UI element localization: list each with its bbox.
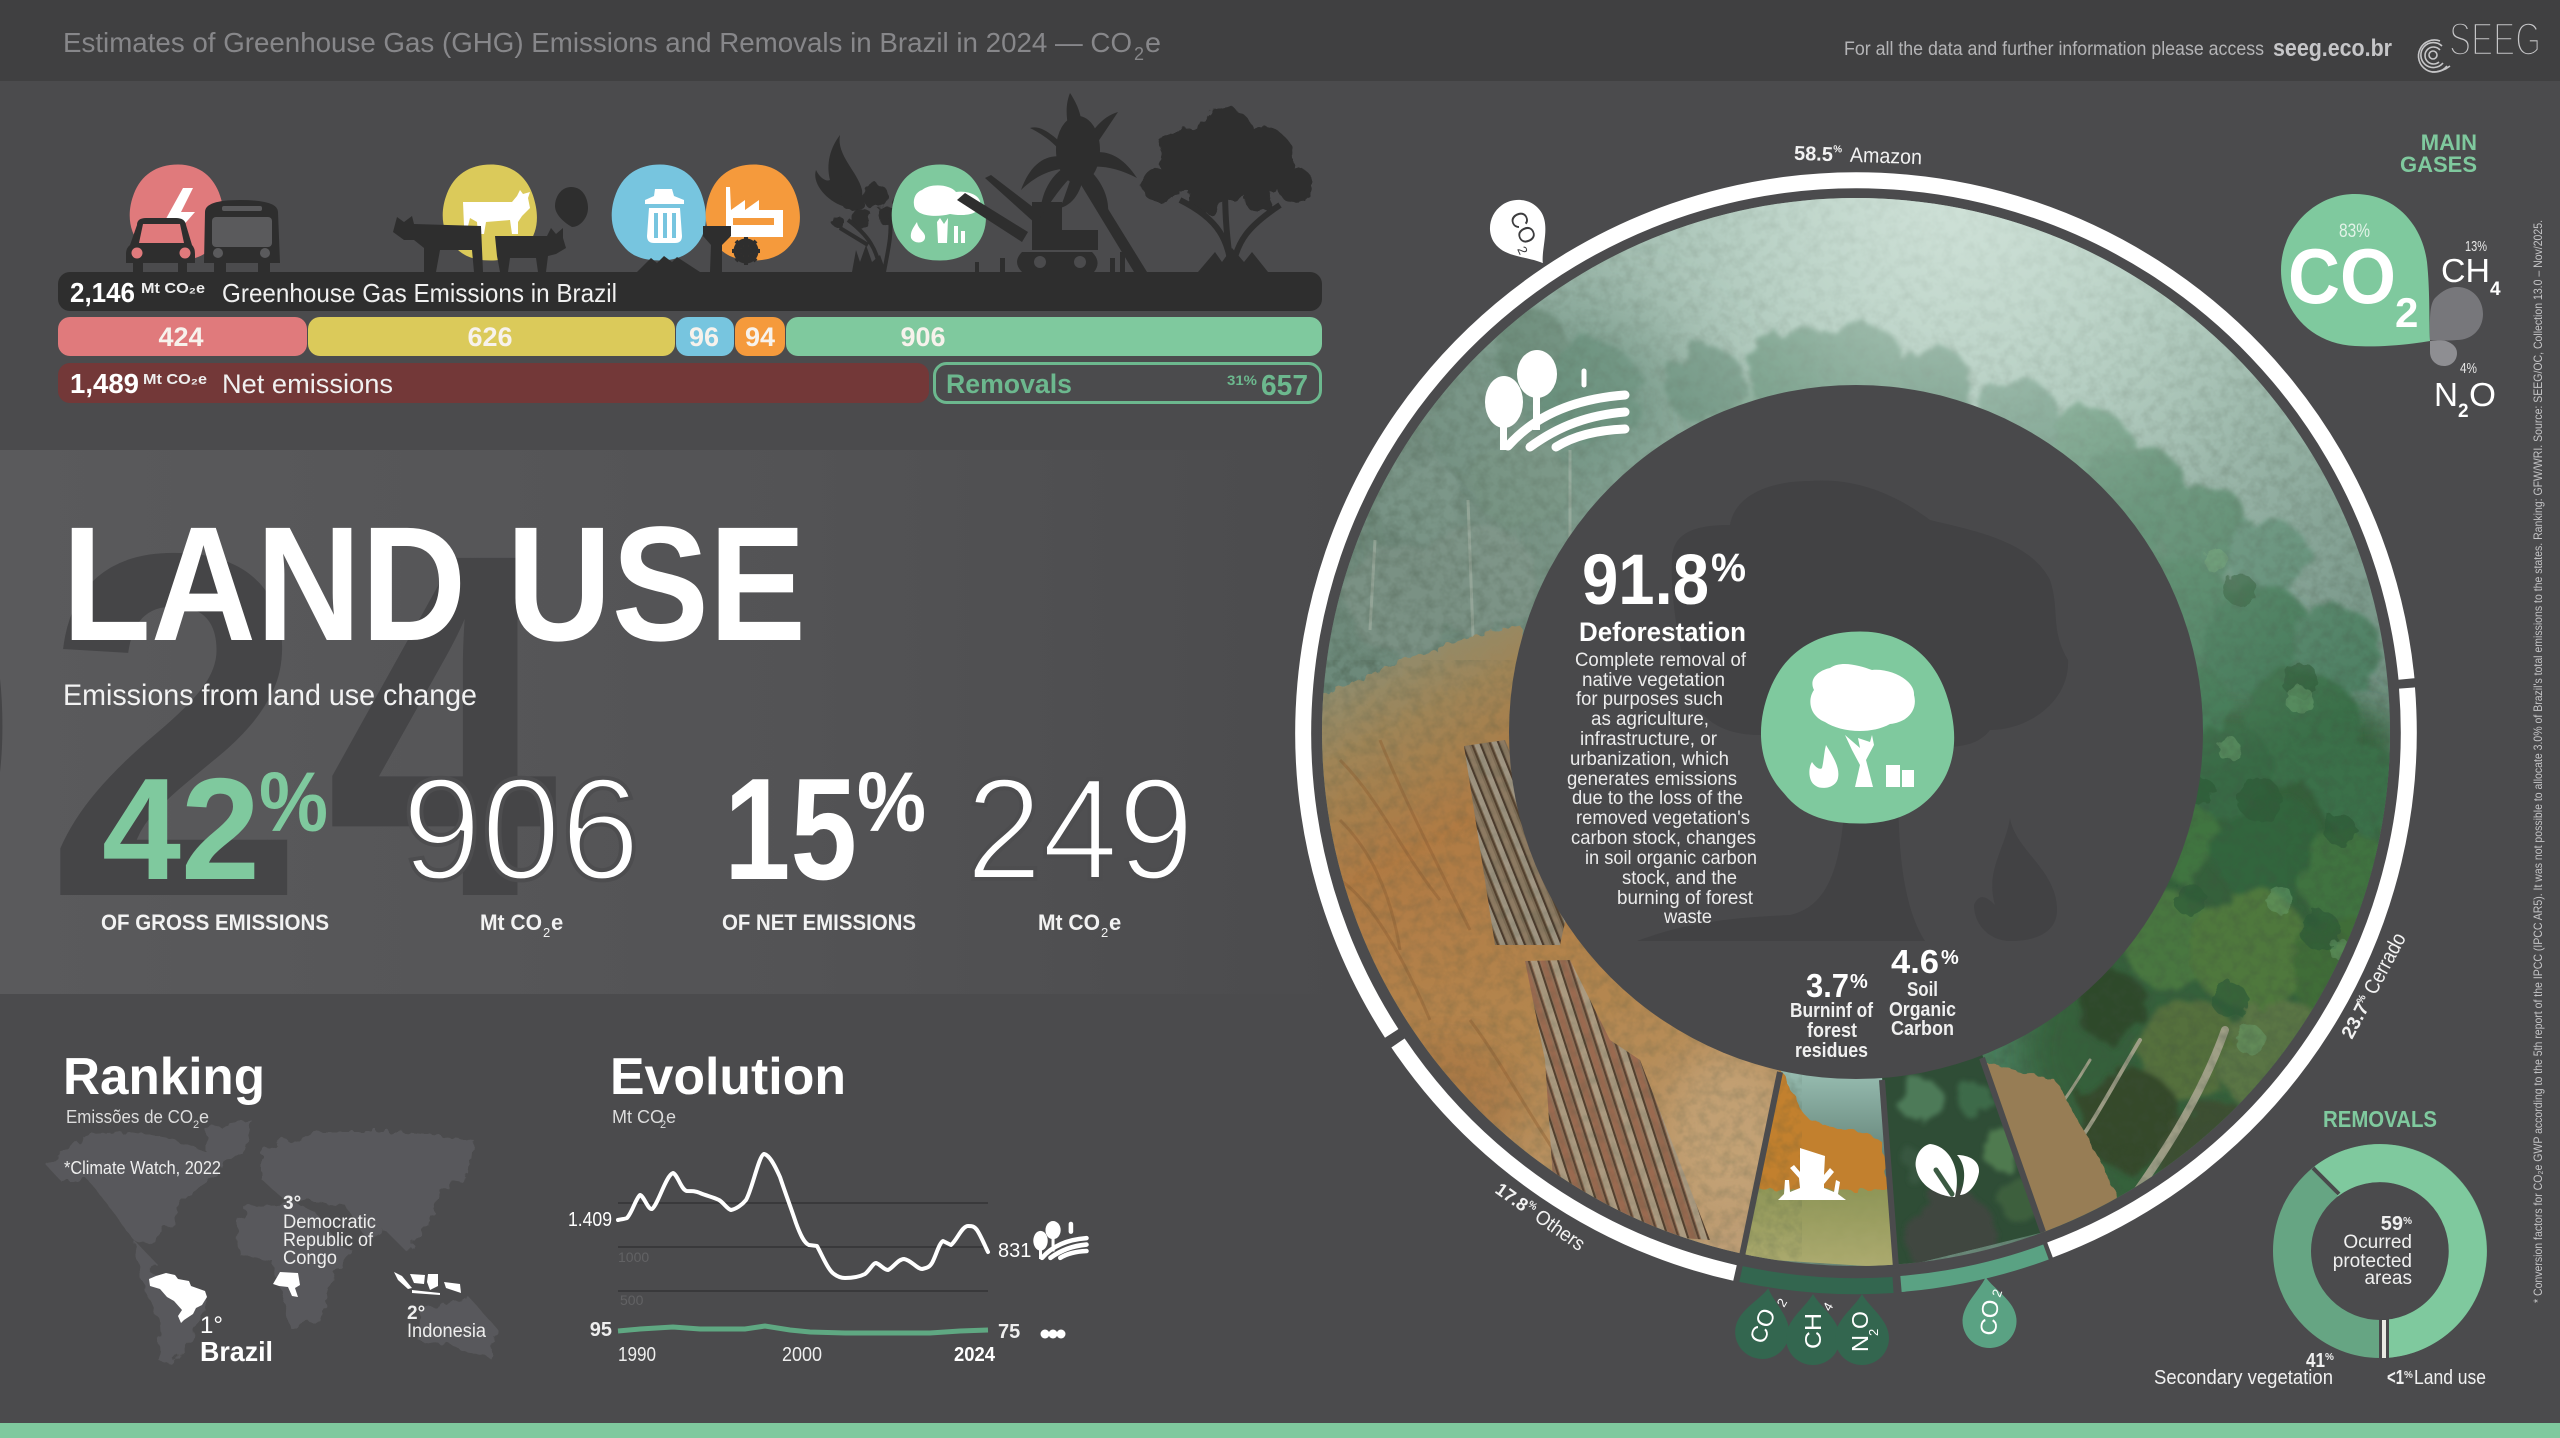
deforestation description: stock, and the bbox=[1622, 868, 1737, 889]
stacked logs bbox=[1464, 740, 1710, 1240]
icon: land use on photo bbox=[1485, 350, 1625, 450]
label: 3rd DR Congo: Congo bbox=[283, 1248, 337, 1269]
website link: seeg.eco.br bbox=[2273, 35, 2392, 62]
stat: soil organic carbon bbox=[1889, 943, 1959, 1040]
gas drops: burning: CO bbox=[1744, 1305, 1781, 1347]
label: 3rd DR Congo: Republic of bbox=[283, 1230, 374, 1251]
line chart: 95 bbox=[590, 1319, 612, 1341]
biome ring bbox=[1303, 180, 2409, 1286]
gas drops: burning: 4 bbox=[1820, 1300, 1836, 1314]
donut label: land use bbox=[2387, 1367, 2486, 1389]
label: CO2 83%: 83% bbox=[2339, 221, 2370, 242]
stat: 15% of net emissions: % bbox=[857, 755, 926, 849]
deforestation description: generates emissions bbox=[1567, 769, 1737, 790]
heading: main gases: GASES bbox=[2400, 152, 2477, 177]
stat: soil organic carbon: Soil bbox=[1907, 979, 1938, 1001]
stat: 42% of gross emissions: 42 bbox=[102, 748, 260, 910]
pin: CO2 Amazon: CO bbox=[1504, 207, 1542, 248]
icon: soil leaves bbox=[1916, 1144, 1979, 1197]
stat: 42% of gross emissions: % bbox=[259, 755, 328, 849]
deforestation description: urbanization, which bbox=[1570, 749, 1729, 770]
segment dividers bbox=[1742, 1058, 2043, 1268]
mist overlay bbox=[1432, 198, 2360, 718]
icon: tree silhouette bbox=[1142, 107, 1313, 272]
heading: ranking: Ranking bbox=[63, 1048, 265, 1106]
deforestation description: waste bbox=[1663, 907, 1712, 928]
panel: main gases bbox=[2281, 130, 2501, 422]
sector icons above the emissions bars bbox=[126, 93, 1313, 272]
deforestation description: in soil organic carbon bbox=[1585, 848, 1757, 869]
gas drops: burning: 2 bbox=[1866, 1329, 1881, 1336]
net emissions bar bbox=[58, 363, 929, 403]
label: 1st Brazil bbox=[200, 1312, 273, 1367]
net emissions bar: Net emissions bbox=[222, 369, 393, 399]
stat: deforestation: % bbox=[1711, 546, 1746, 590]
icon: industry blob bbox=[703, 164, 800, 272]
deforestation description: removed vegetation's bbox=[1576, 808, 1750, 829]
heading: main gases: MAIN bbox=[2421, 130, 2477, 155]
icon: land use blob with machinery and trees bbox=[815, 93, 1313, 272]
label: Others: Others bbox=[1530, 1206, 1589, 1256]
segment: waste 96: 96 bbox=[689, 322, 719, 352]
donut label: protected areas: % bbox=[2403, 1216, 2412, 1227]
stat: burning of forest residues: 3.7 bbox=[1806, 967, 1849, 1004]
header title: 2 bbox=[1134, 44, 1144, 64]
label: CO2 83% bbox=[2288, 221, 2418, 336]
label: 3rd DR Congo bbox=[283, 1193, 376, 1269]
net emissions bar: Mt CO₂e bbox=[143, 371, 207, 388]
removals bar bbox=[934, 364, 1320, 402]
deforestation description: native vegetation bbox=[1582, 670, 1725, 691]
label: N2O 4% bbox=[2434, 360, 2496, 422]
gas drops: burning: N bbox=[1847, 1335, 1873, 1352]
drop: CH4 bbox=[2430, 287, 2483, 340]
label: N2O 4%: O bbox=[2469, 376, 2496, 413]
label: Amazon: 58.5 bbox=[1794, 143, 1833, 166]
subheading: Mt CO bbox=[612, 1107, 664, 1127]
map: DR Congo bbox=[273, 1272, 300, 1297]
icon: waste blob bbox=[612, 164, 706, 272]
background year 2024: 2 bbox=[44, 451, 306, 999]
stat: deforestation: 91.8 bbox=[1582, 541, 1709, 620]
emissions bars bbox=[58, 272, 1322, 403]
gas drop: soil bbox=[1959, 1275, 2019, 1350]
note: climate watch: *Climate Watch, 2022 bbox=[64, 1158, 221, 1178]
deforestation description bbox=[1567, 650, 1757, 928]
ground texture grain bbox=[1322, 660, 1802, 1266]
segment: agriculture 626: 626 bbox=[467, 322, 513, 352]
header title: e bbox=[1145, 27, 1161, 58]
label: 2nd Indonesia: Indonesia bbox=[407, 1321, 486, 1342]
donut label: protected areas: areas bbox=[2364, 1268, 2412, 1289]
line chart: 1990 bbox=[618, 1344, 656, 1366]
donut label: protected areas: Ocurred bbox=[2343, 1232, 2412, 1253]
segment: agriculture 626 bbox=[308, 317, 675, 356]
arc: soil gases bbox=[1901, 1252, 2046, 1284]
arc: Cerrado bbox=[2050, 688, 2409, 1250]
world map bbox=[46, 1120, 498, 1363]
label: Amazon bbox=[1794, 142, 1922, 169]
stat: burning of forest residues bbox=[1790, 967, 1873, 1062]
stat: 906 Mt CO2e: 906 bbox=[402, 748, 640, 910]
map: Brazil bbox=[149, 1273, 207, 1323]
subheading: e bbox=[666, 1107, 676, 1127]
burn segment photo bbox=[1746, 1070, 1893, 1266]
sand on the right side bbox=[1987, 1063, 2117, 1232]
line: land use bbox=[618, 1154, 988, 1278]
deforestation description: as agriculture, bbox=[1591, 709, 1709, 730]
stat: 15% of net emissions: OF NET EMISSIONS bbox=[722, 910, 916, 935]
stat: soil organic carbon: Organic bbox=[1889, 999, 1956, 1021]
icon: agriculture blob with cattle bbox=[393, 164, 588, 272]
subtitle: Emissions from land use change bbox=[63, 679, 477, 712]
segment: energy 424 bbox=[58, 317, 307, 356]
line chart bbox=[568, 1154, 1031, 1366]
panel: ranking bbox=[46, 1048, 498, 1367]
stat: deforestation bbox=[1567, 541, 1757, 928]
donut label: secondary vegetation: Secondary vegetation bbox=[2154, 1367, 2333, 1389]
arc: burning gases bbox=[1741, 1274, 1893, 1286]
drop: N2O bbox=[2430, 340, 2457, 366]
stat: 249 Mt CO2e: 2 bbox=[1101, 925, 1108, 940]
label: 1st Brazil: 1° bbox=[200, 1312, 223, 1339]
title: land use: LAND USE bbox=[62, 492, 806, 675]
header access note: For all the data and further information please access bbox=[1844, 39, 2264, 60]
soil segment photo bbox=[1882, 1055, 2044, 1264]
segment: waste 96 bbox=[676, 317, 734, 356]
stat: 15% of net emissions bbox=[722, 748, 926, 935]
stat: 42% of gross emissions: OF GROSS EMISSIONS bbox=[101, 910, 329, 935]
gas drop: soil: CO bbox=[1975, 1299, 2003, 1336]
gas drops: burning: 2 bbox=[1774, 1296, 1790, 1310]
label: Others: 17.8 bbox=[1492, 1179, 1532, 1215]
stat: 42% of gross emissions bbox=[101, 748, 329, 935]
label: N2O 4%: 4% bbox=[2460, 360, 2477, 377]
label: N2O 4%: N bbox=[2434, 376, 2458, 413]
label: 1st Brazil: Brazil bbox=[200, 1336, 273, 1367]
donut label: secondary vegetation: % bbox=[2325, 1352, 2334, 1363]
deforestation description: due to the loss of the bbox=[1572, 788, 1743, 809]
heading: removals: REMOVALS bbox=[2323, 1106, 2437, 1132]
segment: land use 906 bbox=[786, 317, 1322, 356]
label: Amazon: Amazon bbox=[1850, 144, 1922, 169]
label: Amazon: % bbox=[1833, 144, 1842, 155]
stat: deforestation: Deforestation bbox=[1579, 617, 1746, 647]
label: Cerrado: % bbox=[2355, 993, 2369, 1006]
line: removals bbox=[618, 1326, 988, 1333]
panel: evolution bbox=[568, 1048, 1086, 1366]
heading: main gases bbox=[2400, 130, 2477, 177]
heading: evolution: Evolution bbox=[610, 1048, 846, 1106]
deforestation description: for purposes such bbox=[1576, 689, 1723, 710]
forest canopy bbox=[1700, 397, 2400, 1270]
line chart: 75 bbox=[998, 1321, 1020, 1343]
gross emissions bar: Mt CO₂e bbox=[141, 280, 205, 297]
arc: Amazon bbox=[1303, 180, 2406, 1033]
bare trunks bbox=[2065, 1026, 2229, 1188]
line chart: 831 bbox=[998, 1240, 1031, 1262]
source footnote: * Conversion factors for CO₂e GWP according to the 5th report of the IPCC (IPCC AR5). It was not possible to allocate 3.0% of Brazil's total emissions to the states. Ranking: GFW/WRI. Source: SEEG/OC, Collection 13.0 – Nov/2025. bbox=[2531, 220, 2545, 1303]
label: CH4 13%: 13% bbox=[2465, 238, 2487, 255]
segment: industry 94: 94 bbox=[745, 322, 775, 352]
subheading: 2 bbox=[193, 1119, 199, 1131]
line chart: 1.409 bbox=[568, 1209, 612, 1231]
donut label: secondary vegetation bbox=[2154, 1350, 2334, 1389]
gross emissions bar: 2,146 bbox=[70, 277, 135, 308]
gross emissions bar bbox=[58, 272, 1322, 311]
stat: 906 Mt CO2e: 2 bbox=[543, 925, 550, 940]
background year 2024: 4 bbox=[326, 451, 561, 999]
donut label: secondary vegetation: 41 bbox=[2306, 1350, 2325, 1372]
gas drops: burning bbox=[1732, 1285, 1889, 1365]
stat: burning of forest residues: % bbox=[1850, 971, 1868, 993]
label: 2nd Indonesia bbox=[407, 1303, 486, 1342]
donut label: land use: <1 bbox=[2387, 1367, 2404, 1389]
stat: 249 Mt CO2e: e bbox=[1109, 910, 1121, 935]
removals bar: Removals bbox=[946, 369, 1072, 399]
panel: land use summary band bbox=[0, 450, 1340, 999]
pin: CO2 Amazon: 2 bbox=[1514, 244, 1531, 257]
left misty forest bbox=[1330, 298, 1696, 639]
label: 3rd DR Congo: 3° bbox=[283, 1193, 301, 1214]
sector segments bar bbox=[58, 317, 1322, 356]
stat: burning of forest residues: Burninf of bbox=[1790, 1000, 1873, 1022]
SEEG logo bbox=[2418, 13, 2541, 72]
label: Cerrado bbox=[2336, 929, 2411, 1042]
icon: land use mini bbox=[1033, 1221, 1086, 1259]
line chart: 2024 bbox=[954, 1344, 996, 1366]
segment: industry 94 bbox=[735, 317, 785, 356]
icon: palm tree bbox=[1021, 93, 1147, 272]
stat: 249 Mt CO2e: 249 bbox=[966, 748, 1194, 910]
panel: deforestation photo circle bbox=[1290, 142, 2411, 1365]
icon: energy blob with vehicles bbox=[126, 164, 280, 272]
subheading bbox=[612, 1107, 676, 1131]
label: CH4 13%: 4 bbox=[2490, 279, 2501, 300]
segment: energy 424: 424 bbox=[158, 322, 204, 352]
label: CO2 83%: 2 bbox=[2395, 289, 2418, 336]
stat: 906 Mt CO2e: e bbox=[551, 910, 563, 935]
icon: burning stump bbox=[1778, 1148, 1846, 1200]
inner dark circle bbox=[1509, 385, 2203, 1079]
label: CH4 13% bbox=[2441, 238, 2501, 300]
label: 2nd Indonesia: 2° bbox=[407, 1303, 425, 1324]
bottom green strip bbox=[0, 1423, 2560, 1438]
line chart: 1000 bbox=[618, 1249, 649, 1265]
drop: CO2 bbox=[2281, 194, 2430, 346]
icon: excavator bbox=[957, 175, 1098, 272]
deforestation description: burning of forest bbox=[1617, 888, 1754, 909]
background year 2024 bbox=[0, 451, 561, 999]
stat: soil organic carbon: 4.6 bbox=[1891, 943, 1939, 980]
line chart: 2000 bbox=[782, 1344, 822, 1366]
deforestation description: infrastructure, or bbox=[1580, 729, 1718, 750]
icon: other removals dots bbox=[1040, 1330, 1066, 1338]
gas drops: burning: CH bbox=[1800, 1313, 1826, 1349]
label: Cerrado: 23.7 bbox=[2338, 1000, 2374, 1042]
gas drop: soil: 2 bbox=[1989, 1287, 2005, 1299]
sandy clearing bbox=[1322, 626, 1780, 1256]
pin: CO2 Amazon bbox=[1479, 189, 1566, 279]
map: Indonesia bbox=[394, 1272, 461, 1295]
subheading: e bbox=[199, 1107, 209, 1127]
label: N2O 4%: 2 bbox=[2458, 401, 2469, 422]
label: Others: % bbox=[1526, 1199, 1539, 1213]
subheading: Emissões de CO bbox=[66, 1107, 193, 1127]
donut label: protected areas bbox=[2333, 1213, 2412, 1289]
gross emissions bar: Greenhouse Gas Emissions in Brazil bbox=[222, 278, 617, 308]
removals bar: 31% bbox=[1227, 372, 1258, 388]
label: Cerrado: Cerrado bbox=[2360, 929, 2411, 998]
icon: central deforestation blob bbox=[1761, 632, 1954, 824]
donut label: land use: % bbox=[2404, 1370, 2413, 1381]
deforestation description: carbon stock, changes bbox=[1571, 828, 1756, 849]
tree silhouette in inner circle bbox=[1637, 481, 2068, 941]
donut label: protected areas: 59 bbox=[2381, 1213, 2403, 1235]
label: Others bbox=[1491, 1178, 1589, 1256]
removals bar: 657 bbox=[1261, 370, 1308, 402]
label: CH4 13%: CH bbox=[2441, 252, 2490, 289]
stat: burning of forest residues: forest bbox=[1807, 1020, 1857, 1042]
stat: 249 Mt CO2e: Mt CO bbox=[1038, 910, 1100, 935]
stat: 906 Mt CO2e: Mt CO bbox=[480, 910, 542, 935]
forest texture grain bbox=[1322, 198, 2390, 1266]
gas drops: burning: O bbox=[1847, 1311, 1873, 1329]
stat: soil organic carbon: Carbon bbox=[1891, 1018, 1954, 1040]
subheading: 2 bbox=[660, 1119, 666, 1131]
label: 3rd DR Congo: Democratic bbox=[283, 1212, 376, 1233]
deforestation description: Complete removal of bbox=[1575, 650, 1747, 671]
line chart: 500 bbox=[620, 1292, 644, 1308]
stat: 15% of net emissions: 15 bbox=[724, 748, 857, 910]
donut chart bbox=[2292, 1163, 2468, 1358]
stat: soil organic carbon: % bbox=[1941, 947, 1959, 969]
donut label: protected areas: protected bbox=[2333, 1251, 2412, 1272]
header bar bbox=[0, 0, 2560, 81]
segment: land use 906: 906 bbox=[900, 322, 946, 352]
net emissions bar: 1,489 bbox=[70, 368, 139, 399]
donut label: land use: Land use bbox=[2414, 1367, 2486, 1389]
arc: Others bbox=[1398, 1043, 1735, 1273]
panel: removals bbox=[2154, 1106, 2486, 1389]
header title: Estimates of Greenhouse Gas (GHG) Emissions and Removals in Brazil in 2024 — CO bbox=[63, 27, 1132, 58]
label: CO2 83%: CO bbox=[2288, 232, 2396, 320]
forest and clearing photo illustration bbox=[1290, 198, 2405, 1290]
stat: burning of forest residues: residues bbox=[1795, 1040, 1868, 1062]
